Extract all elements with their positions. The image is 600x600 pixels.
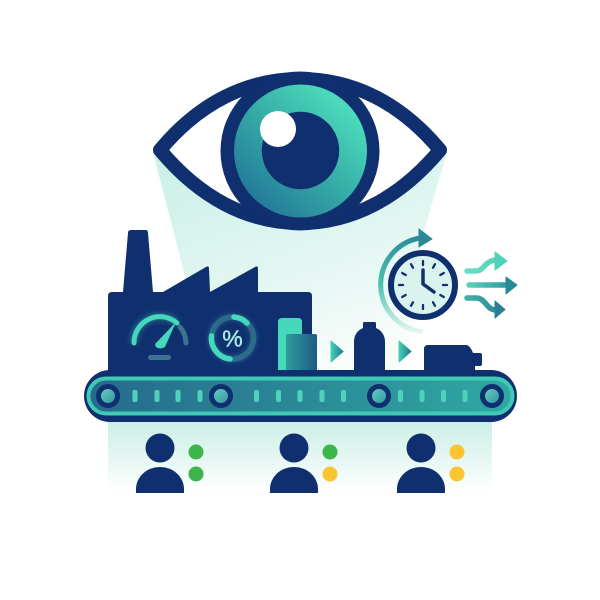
light beam from eye: [153, 152, 447, 372]
cycle arrowhead: [419, 229, 432, 247]
roller two: [212, 386, 230, 406]
conveyor belt: [84, 370, 517, 422]
cycle arc: [381, 238, 423, 332]
roller three: [370, 386, 388, 406]
factory silhouette: [108, 230, 312, 374]
pupil: [262, 112, 339, 189]
belt frame: [84, 370, 517, 422]
clock ticks: [399, 261, 447, 309]
icon: eye: [160, 72, 440, 230]
icon: factory: [108, 230, 317, 374]
icon: bottle: [354, 322, 385, 372]
belt band: [88, 378, 512, 414]
person one with status dots: [136, 434, 204, 493]
icon: arrow marker one: [331, 341, 343, 362]
person three with status dots: [397, 434, 464, 493]
percent dial: %: [222, 326, 243, 352]
arrow straight: [469, 277, 517, 294]
belt slots: [132, 390, 468, 402]
light floor under conveyor: [108, 420, 492, 496]
clock face: [391, 253, 455, 317]
eye highlight: [260, 111, 296, 147]
roller one: [98, 386, 118, 406]
gauge: [134, 317, 186, 360]
eye outline: [160, 79, 440, 223]
icon: battery package: [424, 345, 482, 372]
teal bar: [278, 318, 302, 372]
iris ring: [220, 72, 380, 230]
clock hands: [423, 270, 434, 292]
gradient bar: [286, 334, 317, 372]
person two with status dots: [270, 434, 338, 493]
icon: three flow arrows: [467, 252, 517, 318]
roller four: [482, 386, 502, 406]
iris: [234, 84, 367, 218]
icon: arrow marker two: [399, 341, 411, 362]
icon: clock with cycle arrow: [381, 229, 455, 332]
arrow up: [467, 252, 507, 271]
percent dial: [211, 317, 254, 359]
arrow down: [467, 298, 505, 318]
